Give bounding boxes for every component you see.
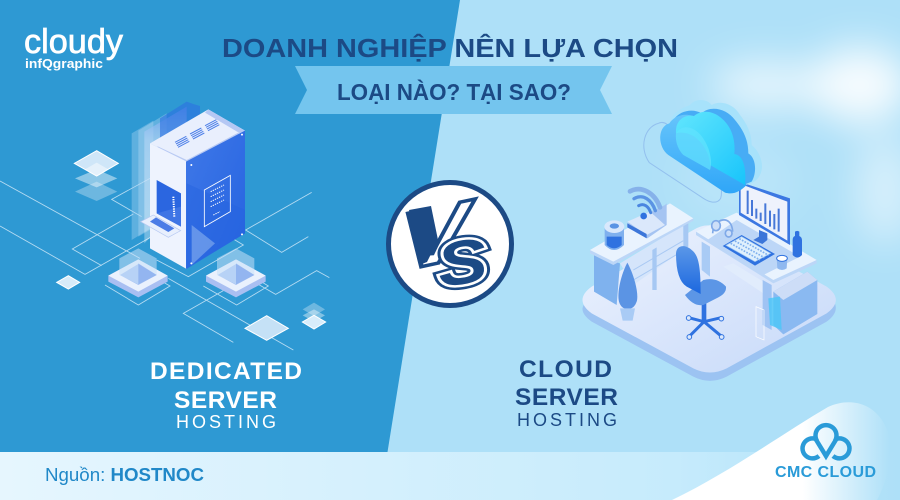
server front label <box>204 175 230 227</box>
ribbon subtitle: LOẠI NÀO? TẠI SAO? <box>337 78 571 105</box>
label: cloud server hosting: CLOUD <box>519 356 612 383</box>
label: dedicated server hosting: DEDICATED <box>150 358 302 385</box>
label: dedicated server hosting: HOSTING <box>176 412 276 432</box>
server layered panels <box>132 102 200 243</box>
server cabinet <box>141 109 245 269</box>
CMC cloud icon <box>803 425 849 458</box>
logo: CMC Cloud: CMC CLOUD <box>775 464 876 481</box>
background: left blue panel <box>0 0 460 452</box>
label: dedicated server hosting <box>150 358 302 432</box>
jar <box>604 220 624 250</box>
logo: cloudy infographic: infQgraphic <box>25 56 103 71</box>
network lines illustration <box>0 178 329 350</box>
S letter: S <box>433 226 492 301</box>
label: cloud server hosting <box>515 356 618 430</box>
icon: stacked diamonds right <box>302 303 326 329</box>
router with wifi <box>627 189 667 238</box>
illustration: cloud workstation <box>582 100 836 381</box>
icon: small diamond <box>57 276 80 289</box>
logo: CMC Cloud <box>775 425 876 481</box>
cloud outline <box>644 122 721 202</box>
icon: stacked diamonds left <box>74 151 118 201</box>
server pad right <box>206 248 266 297</box>
monitor <box>739 182 790 245</box>
bottle <box>793 231 802 257</box>
label: dedicated server hosting: SERVER <box>174 387 277 414</box>
right desk <box>696 213 817 330</box>
chair <box>676 246 726 339</box>
plant <box>618 263 637 321</box>
V letter: V <box>399 182 478 289</box>
server laptop tray <box>141 215 181 237</box>
mug <box>777 255 787 270</box>
VS badge <box>388 182 512 306</box>
platform <box>582 225 836 381</box>
wifi icon <box>630 189 660 219</box>
footer white swoosh <box>672 402 890 500</box>
monitor bar chart <box>748 191 779 232</box>
logo: cloudy infographic: cloudy <box>24 23 123 61</box>
server side screen <box>157 180 181 227</box>
server vents <box>175 120 219 147</box>
left desk <box>590 203 693 305</box>
keyboard <box>723 235 775 266</box>
ribbon banner <box>295 66 612 114</box>
S letter: S <box>433 226 492 301</box>
cloud <box>660 100 762 193</box>
headset <box>712 220 733 237</box>
source note: Nguồn: HOSTNOC <box>45 465 204 485</box>
server pad left <box>108 248 168 297</box>
title: DOANH NGHIỆP NÊN LỰA CHỌN <box>222 33 678 63</box>
label: cloud server hosting: SERVER <box>515 384 618 411</box>
icon: large diamond <box>245 316 288 340</box>
background: soft clouds top right <box>680 47 900 245</box>
illustration: dedicated server <box>57 102 326 340</box>
footer strip <box>0 452 900 500</box>
label: cloud server hosting: HOSTING <box>517 410 617 430</box>
computer tower <box>756 272 817 340</box>
